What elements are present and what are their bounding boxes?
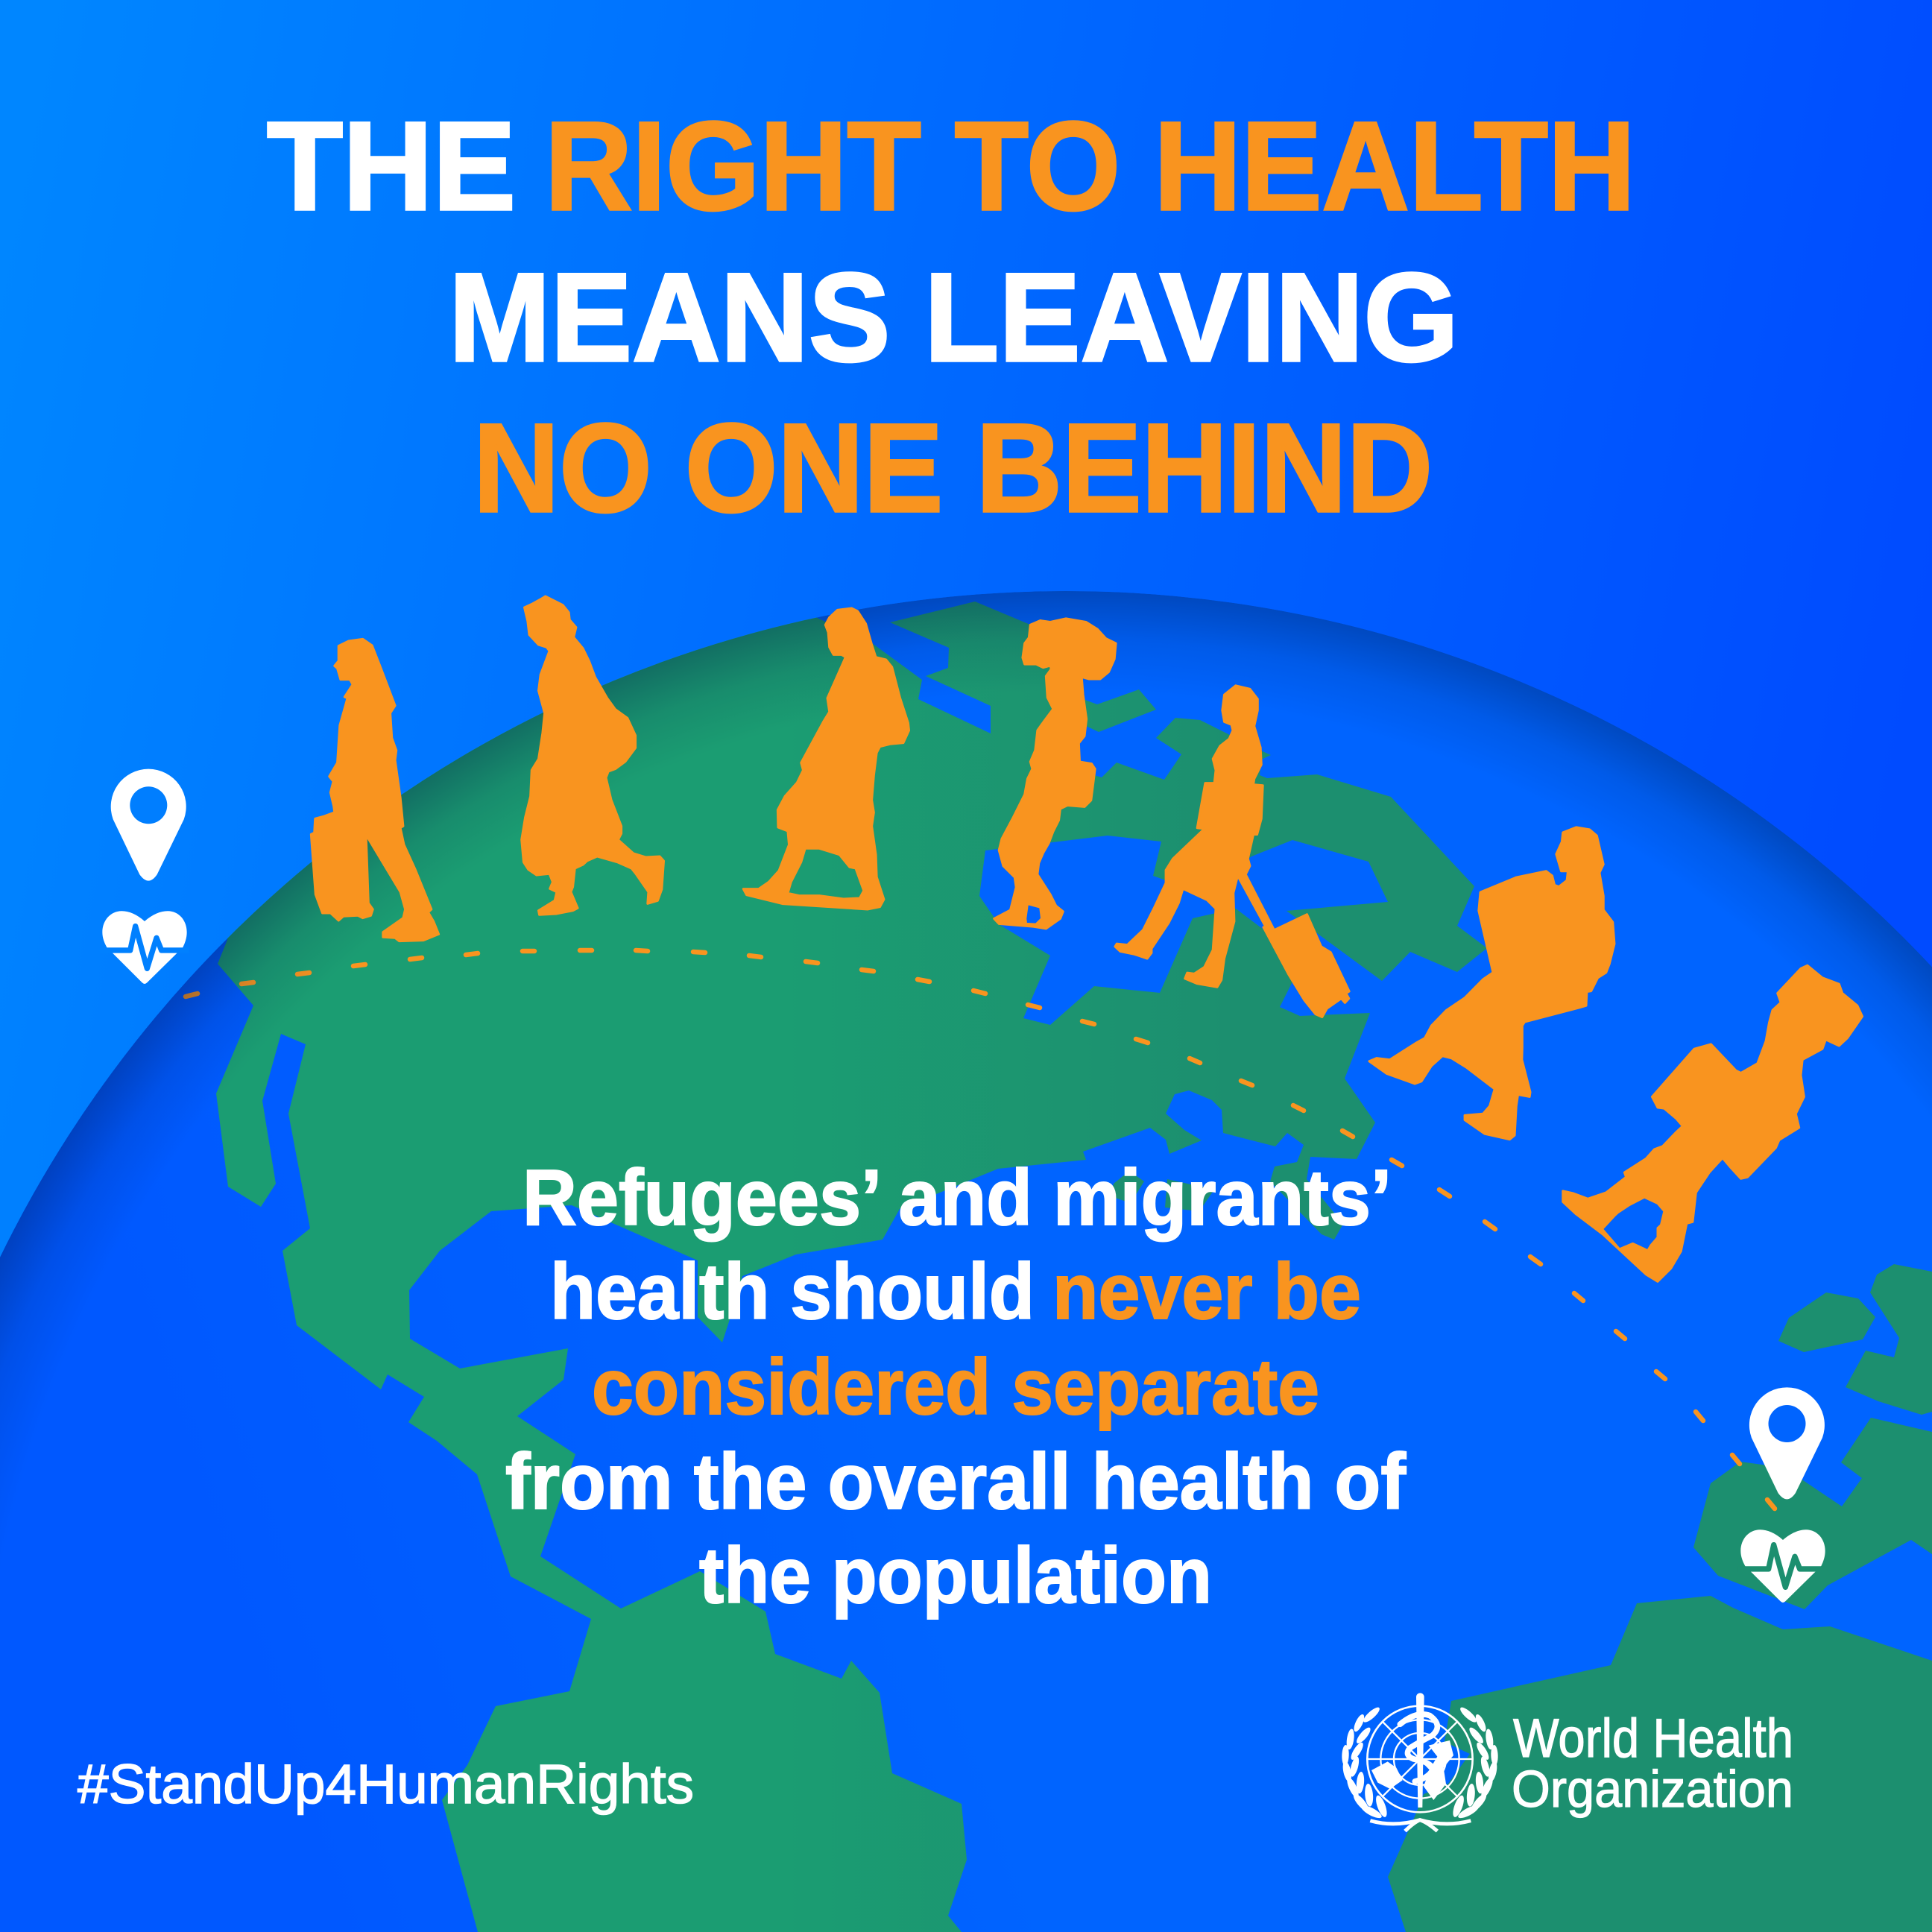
emblem: ribbon [1370,1820,1471,1831]
WHO wordmark: Organization [1512,1760,1793,1818]
emblem: globe rings and grid [1367,1706,1473,1812]
title: MEANS LEAVING [449,247,1459,388]
title: THE [267,95,516,236]
migration route dashed line [186,950,1775,1509]
icon: start heart with pulse [99,911,189,984]
title: RIGHT TO HEALTH [545,95,1635,236]
title [267,95,1635,538]
icon: start location pin [111,769,186,881]
message text block: from the overall health of [505,1438,1407,1526]
globe ocean [0,591,1932,1932]
continent: North and Central America [216,566,1487,1932]
figure 3: woman with backpack [743,608,909,909]
hashtag: #StandUp4HumanRights [78,1753,694,1815]
WHO wordmark: World Health [1513,1708,1793,1769]
WHO emblem [1342,1693,1498,1831]
message text block: the population [699,1532,1212,1620]
message text block: health should [550,1248,1035,1336]
message text block: considered separate [592,1343,1319,1431]
message text block: Refugees’ and migrants’ [523,1154,1392,1242]
WHO wordmark [1512,1708,1793,1818]
emblem: rod and serpent [1400,1693,1437,1808]
emblem: laurel wreath right [1450,1705,1498,1820]
message text block: never be [1052,1248,1361,1336]
continent: Europe and Africa [1388,1264,1932,1932]
islands near the Caribbean [1113,1175,1213,1210]
icon: destination location pin [1749,1387,1825,1499]
globe with continents [0,566,1932,1932]
figure 6: person leaning with backpack [1369,827,1614,1140]
title: NO ONE BEHIND [473,397,1433,538]
emblem: laurel wreath left [1342,1705,1389,1820]
figure 4: person carrying load on head [994,619,1116,929]
figure 1: person pulling suitcase [311,639,439,941]
icon: destination heart with pulse [1737,1530,1827,1603]
message text block [505,1154,1407,1620]
emblem: continents [1371,1740,1453,1800]
figure 7: person tilted with load and backpack [1563,965,1863,1281]
figure 5: woman with trolley case [1115,686,1349,1017]
globe edge shadow [0,591,1932,1486]
figure 2: woman with bundle [522,596,664,915]
